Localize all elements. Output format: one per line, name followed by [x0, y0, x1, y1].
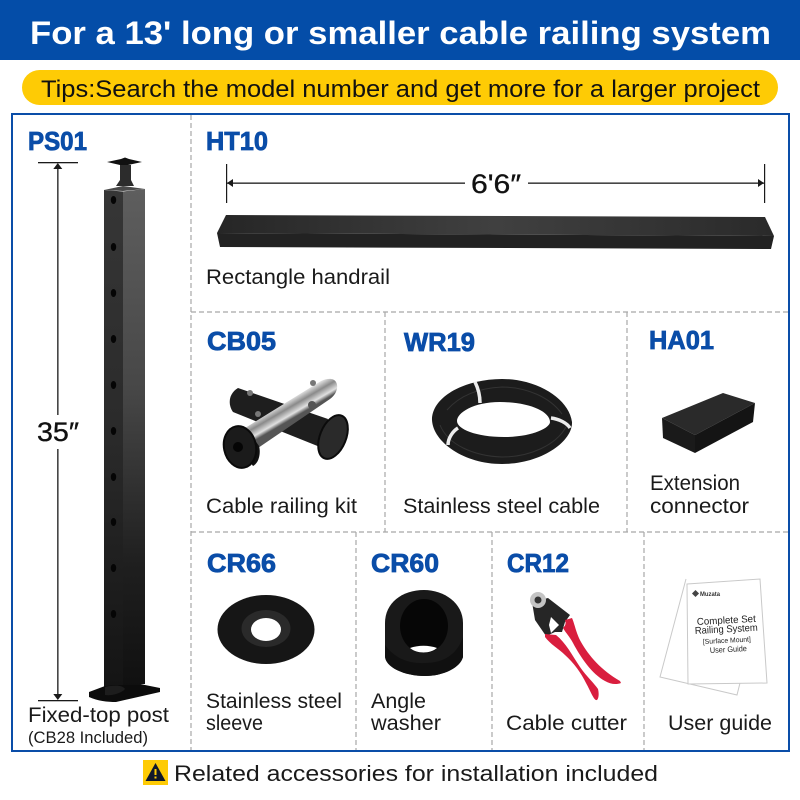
header banner — [0, 0, 800, 60]
panel: PS01 post — [28, 126, 169, 747]
footer note — [143, 760, 658, 786]
label: angle washer: Angle — [371, 690, 426, 713]
heading: HA01: HA01 — [649, 325, 714, 355]
dimension: 35 inches: 35″ — [37, 417, 79, 447]
angle washer — [385, 590, 463, 676]
booklet: Railing System — [695, 623, 758, 637]
dimension: 6'6": 6'6″ — [471, 169, 521, 199]
title: For a 13' long or smaller cable railing system — [30, 15, 771, 51]
label: cable cutter: Cable cutter — [506, 712, 627, 735]
label: extension connector: Extension — [650, 472, 740, 495]
heading: PS01: PS01 — [28, 126, 87, 156]
label: rectangle handrail: Rectangle handrail — [206, 266, 390, 289]
booklet — [660, 579, 767, 695]
panel: CR66 stainless steel sleeve — [206, 548, 342, 735]
heading: CR12: CR12 — [507, 548, 569, 578]
panel: user guide — [660, 579, 772, 735]
panel: CR12 cable cutter — [506, 548, 627, 735]
panel: HA01 extension connector — [649, 325, 755, 518]
washer — [218, 595, 314, 664]
handrail — [217, 215, 774, 249]
cable railing kit parts — [220, 379, 354, 471]
panel: CR60 angle washer: washer — [370, 712, 441, 735]
heading: CR66: CR66 — [207, 548, 276, 578]
connector block — [662, 393, 755, 453]
note: CB28 included: (CB28 Included) — [28, 729, 148, 747]
heading: WR19: WR19 — [404, 327, 475, 357]
label: cable railing kit: Cable railing kit — [206, 495, 357, 518]
booklet: Muzata — [700, 592, 721, 598]
tips banner — [22, 70, 778, 105]
cable cutter — [530, 592, 621, 700]
cable coil — [432, 379, 572, 464]
booklet: Complete Set — [697, 614, 756, 628]
label: user guide: User guide — [668, 712, 772, 735]
length dimension arrow — [226, 164, 765, 203]
booklet: [Surface Mount] — [703, 636, 751, 646]
main frame — [12, 114, 789, 751]
label: fixed-top post: Fixed-top post — [28, 704, 169, 727]
panel: CB05 cable railing kit — [206, 326, 357, 518]
panel: CR66 stainless steel sleeve: sleeve — [206, 712, 263, 735]
footer text: Related accessories for installation included — [174, 761, 658, 786]
post — [89, 158, 160, 702]
panel: WR19 stainless steel cable — [403, 327, 600, 518]
booklet: User Guide — [710, 644, 748, 655]
heading: HT10: HT10 — [206, 126, 268, 156]
icon: warning — [143, 760, 168, 785]
label: stainless steel sleeve: Stainless steel — [206, 690, 342, 713]
panel: HT10 handrail — [206, 126, 774, 289]
panel: CR60 angle washer — [370, 548, 463, 735]
height dimension arrow — [38, 162, 78, 701]
heading: CB05: CB05 — [207, 326, 276, 356]
panel: HA01 extension connector: connector — [650, 495, 749, 518]
tips text: Tips:Search the model number and get more for a larger project — [41, 76, 760, 103]
label: stainless steel cable: Stainless steel cable — [403, 495, 600, 518]
heading: CR60: CR60 — [371, 548, 439, 578]
